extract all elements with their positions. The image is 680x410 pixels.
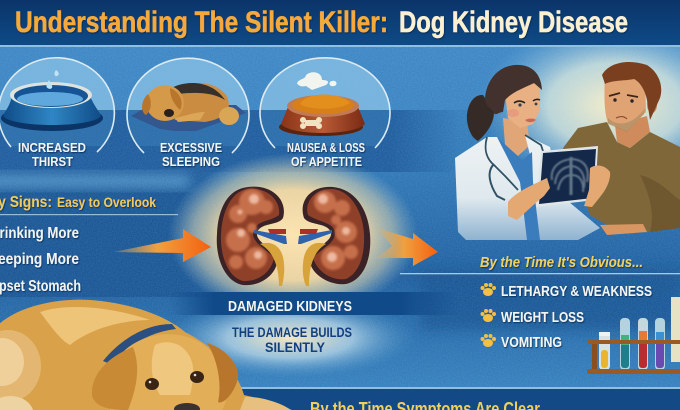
heading: Easy to Overlook <box>57 194 156 210</box>
icon: paw <box>480 283 496 296</box>
owner <box>563 62 680 235</box>
list: lethargy and weakness: LETHARGY & WEAKNESS <box>501 284 652 300</box>
right kidney <box>298 187 370 286</box>
icon: damaged kidneys <box>217 187 370 286</box>
label: INCREASED <box>18 140 86 155</box>
list <box>0 225 81 295</box>
illustration: golden retriever <box>0 300 292 410</box>
title: Understanding The Silent Killer: <box>15 6 388 39</box>
head <box>108 334 227 410</box>
nose <box>174 403 200 410</box>
label: SLEEPING <box>162 154 220 169</box>
label: EXCESSIVE <box>160 140 222 155</box>
doctor <box>455 65 600 240</box>
label: NAUSEA & LOSS <box>287 141 365 155</box>
hands <box>508 165 610 220</box>
illustration: test tube rack <box>587 297 680 374</box>
arrow: kidneys to symptoms <box>376 228 438 266</box>
heading: By the Time It's Obvious... <box>480 254 643 271</box>
illustration: doctor and owner with x-ray <box>455 62 680 240</box>
panel: by the time it's obvious <box>400 254 680 351</box>
arrow: signs to kidneys <box>113 229 211 262</box>
icon: paw <box>480 334 496 347</box>
list: weight loss: WEIGHT LOSS <box>501 310 584 326</box>
ponytail <box>467 95 494 141</box>
label <box>287 141 365 169</box>
panel: symptom 2 excessive sleeping <box>127 58 249 170</box>
hair <box>485 65 542 114</box>
eyes <box>145 378 159 390</box>
icon: paw <box>480 309 496 322</box>
title: Dog Kidney Disease <box>399 6 628 39</box>
list: weight loss <box>480 309 584 326</box>
icon: food bowl <box>279 72 365 136</box>
panel: early signs <box>0 194 178 295</box>
damaged kidneys label band: DAMAGED KIDNEYS <box>228 299 352 315</box>
collar <box>103 324 176 364</box>
label <box>160 140 222 169</box>
header banner <box>0 0 680 47</box>
x-ray <box>536 146 598 207</box>
label: OF APPETITE <box>291 155 362 169</box>
list: vomiting: VOMITING <box>501 335 562 351</box>
left kidney <box>217 187 287 286</box>
icon: water bowl <box>1 70 103 131</box>
caption: the damage builds silently: THE DAMAGE BUILDS <box>232 325 352 340</box>
caption: the damage builds silently <box>232 325 352 355</box>
label: THIRST <box>32 154 73 169</box>
label <box>18 140 86 169</box>
panel: symptom 3 nausea and loss of appetite <box>260 58 390 169</box>
damaged kidneys label band <box>170 292 460 315</box>
list: vomiting <box>480 334 562 351</box>
icon: sleeping dog <box>131 83 246 131</box>
footer band <box>0 387 680 410</box>
panel: symptom 1 increased thirst <box>0 58 115 169</box>
heading <box>0 194 156 211</box>
caption: the damage builds silently: SILENTLY <box>265 340 325 355</box>
